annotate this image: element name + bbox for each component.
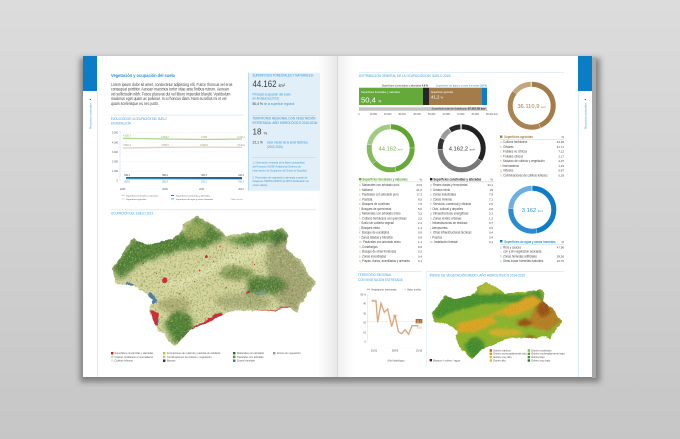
table: forest surfaces: 1,4 (418, 226, 422, 230)
legend: land use (111, 352, 301, 363)
table: built surfaces: 0,4 (489, 230, 493, 234)
table: agricultural surfaces: 41,71 (557, 145, 564, 149)
donut: forest: 44.162 km² (379, 146, 403, 152)
legend: NDVI: Blancos / nubes / agua (433, 358, 461, 362)
axis: 80.000 (472, 113, 480, 116)
table: built surfaces: l. Puertos (430, 235, 442, 239)
text: main land occupation: Principal ocupación del suelo (252, 93, 291, 97)
data labels (123, 135, 246, 184)
table: forest surfaces: f. Bosques de quercíneas (359, 207, 392, 211)
table: forest surfaces: Superficies forestales y naturales (362, 177, 408, 182)
legend: land use: Formaciones de matorral y pastizal sin arbolado (167, 352, 221, 355)
legend: Superficies forestales y naturales (126, 194, 159, 197)
table: forest surfaces: 5,0 (418, 207, 422, 211)
panel: general distribution bar (358, 72, 564, 116)
data labels: 4.526,7 (123, 135, 132, 137)
footnotes: 1. Información extraída de la Base cartográfica (252, 160, 305, 165)
legend: NDVI: Estrés muy bajo (531, 358, 551, 362)
series: forest (123, 138, 242, 140)
table: built surfaces: 7,9 (489, 192, 493, 196)
table: forest surfaces (358, 177, 423, 263)
data labels: 4.399 (201, 137, 208, 139)
table: forest surfaces: d. Pastizal (359, 197, 372, 201)
table: forest surfaces: i. Suelo sin cubierta vegetal (359, 221, 394, 225)
table: water surfaces: 29,36 (557, 254, 564, 258)
axis (358, 110, 498, 116)
legend: land use: Cultivos leñosos (114, 360, 133, 363)
legend: Superficies de agua y zonas húmedas (176, 198, 214, 201)
data labels: 18,0 (417, 327, 422, 330)
x labels: 15/16 (416, 350, 423, 353)
legend: NDVI: Estrés máximo (493, 348, 511, 352)
table: built surfaces: c. Zonas industriales (430, 192, 456, 197)
series: water ribbon (126, 176, 242, 179)
heading: forest surfaces: SUPERFICIES FORESTALES Y NATURALES¹ (252, 74, 314, 78)
heading: vegetated territory (252, 116, 318, 125)
table: agricultural surfaces: 44,39 (557, 140, 564, 144)
table: water surfaces: % (561, 240, 564, 244)
axis: 10.000 (370, 113, 378, 116)
data labels: 316,2 (238, 182, 245, 184)
table: forest surfaces: c. Pastizales con arbolado puro (359, 192, 399, 197)
table: forest surfaces: % (419, 178, 422, 182)
table: forest surfaces: 8,5 (418, 197, 422, 201)
table: agricultural surfaces: h. Combinaciones de cultivos leñosos (500, 173, 548, 177)
heading: vegetated territory: ESTRESADA. AÑO HIDROLÓGICO 2015-2016² (252, 120, 318, 125)
text block: intro: maximus eget quam ac pulvinar. In a rhoncus diam. Nam eu tellus mi et vel (111, 97, 227, 101)
panel: line chart land use evolution: 2009 (162, 188, 168, 191)
panel: line chart land use evolution (111, 114, 246, 201)
axis: 50 % (360, 293, 367, 296)
table: forest surfaces: 1,1 (418, 240, 422, 244)
heading: map title: ÍNDICE DE VEGETACIÓN MEDIO. AÑO HIDROLÓGICO 2014-2015 (430, 272, 525, 277)
heading: distribution title: DISTRIBUCIÓN GENERAL DE LA OCUPACIÓN DEL SUELO 2015¹ (359, 73, 452, 78)
map: water bodies (127, 282, 268, 326)
tab: right section marker: Recursos naturales (584, 103, 588, 129)
stressed line (372, 301, 418, 334)
heading: chart title (358, 273, 403, 282)
axis labels: 3.000 (112, 151, 119, 154)
labels above bar (382, 84, 487, 88)
total bar: Superficie total de Andalucía: 87.597,85 km² (432, 107, 486, 111)
table: water surfaces: 47,96 (557, 246, 564, 250)
x labels (371, 350, 423, 362)
donut: agricultural: 36.110,9 km² (517, 104, 546, 110)
legend: NDVI: Estrés muy alto (493, 355, 512, 359)
table: water surfaces: con y sin vegetación asociada (503, 249, 542, 254)
panel: line chart land use evolution: 2011 (199, 188, 205, 191)
heading: chart title: EVOLUCIÓN DE LA OCUPACIÓN DEL SUELO (111, 116, 167, 121)
legend: land use: Bosque (167, 360, 176, 363)
data labels (372, 300, 422, 330)
legend: NDVI: Estrés moderado (531, 348, 552, 352)
axis: 90.000 km² (486, 113, 498, 116)
value tag: 21,1 (417, 320, 422, 323)
table: water surfaces (500, 240, 564, 263)
tab: right section marker (578, 56, 592, 129)
table: built surfaces: 29 (490, 188, 493, 192)
series: water (126, 178, 242, 179)
table: forest surfaces: j. Bosques mixto (358, 226, 380, 230)
map: NDVI (431, 281, 564, 359)
table: built surfaces: a. Redes viarias y ferroviarias (430, 183, 468, 187)
text block: intro: consequat porttitor. Aenean maximus tortor vitae ante finibus rutrum. Aenean (111, 87, 229, 92)
total bar (359, 107, 487, 111)
footnotes: imágenes TERRA-MODIS de NDVI (Evaluación de (252, 179, 310, 183)
table: forest surfaces: 0,1 (418, 259, 422, 263)
heading: chart title: CON VEGETACIÓN ESTRESADA (358, 277, 403, 282)
table: forest surfaces: 7,5 (418, 202, 422, 206)
table: built surfaces: d. Zonas mineras (430, 197, 452, 201)
table: forest surfaces: l. Zonas taladas y tránsitos (359, 235, 393, 239)
axis labels: 4.000 (112, 141, 119, 144)
table: agricultural surfaces: 1,23 (558, 164, 564, 168)
axis: 20.000 (384, 113, 392, 116)
table: forest surfaces: 0,4 (418, 254, 422, 258)
axis: 30.000 (398, 113, 406, 116)
data labels: 396,2 (162, 175, 169, 177)
table: forest surfaces: 3,2 (418, 212, 422, 216)
table: forest surfaces: o. Bosque de otras frondosas (359, 249, 397, 254)
legend: Superficies agrícolas (126, 198, 147, 201)
page: left (83, 56, 338, 377)
axis labels: 0 (117, 180, 119, 182)
stacked bar: Superficies forestales y naturales (361, 90, 401, 94)
legend: land use: Superficies construidas y alteradas (114, 352, 154, 355)
axis: 40 (363, 303, 367, 306)
donut: forest (369, 127, 412, 170)
table: built surfaces: b. Urbano mixto (430, 188, 450, 192)
data labels: 3.611,0 (237, 145, 245, 147)
data labels: 416,2 (238, 175, 245, 177)
legend: NDVI: Estrés bajo (531, 355, 545, 359)
footnotes (252, 160, 310, 187)
axis labels: 2.000 (112, 160, 119, 164)
footnotes: 2. Porcentaje de vegetación estresada a partir de (252, 175, 308, 179)
legend: NDVI (430, 348, 565, 362)
map: urban areas (116, 234, 294, 335)
table: built surfaces: e. Servicios, comercial y oficinas (430, 202, 471, 206)
data labels: 4.416,2 (237, 137, 246, 139)
series: agricultural (123, 146, 242, 149)
axis (360, 293, 367, 344)
table: built surfaces: m. Instalación forestal (430, 240, 458, 244)
legend: land use: Cultivos herbáceos e invernaderos (114, 356, 154, 359)
table: agricultural surfaces: 0,87 (558, 168, 564, 172)
heading: chart title: TERRITORIO REGIONAL (358, 273, 392, 277)
table: forest surfaces: 0,3 (418, 250, 422, 254)
table: agricultural surfaces: 2,17 (558, 154, 564, 158)
table: built surfaces: 0,7 (489, 221, 493, 225)
legend: Vegetación estresada (371, 287, 397, 291)
table: forest surfaces: m. Pastizales con arbolado mixto (359, 240, 401, 244)
tab: left section marker: Recursos naturales (88, 103, 92, 129)
table: agricultural surfaces: d. Frutales cítricos (500, 154, 524, 158)
data labels: 315,1 (201, 182, 208, 184)
axis labels: 5.000 (112, 132, 119, 135)
tab: left section marker (83, 56, 97, 129)
table: forest surfaces: q. Playas, dunas, acantilados y arenales (359, 259, 410, 263)
axis: 50.000 (428, 113, 436, 116)
figure: 44.162 km2: 44.162 km² (252, 78, 286, 89)
table: built surfaces: 7,1 (489, 197, 493, 201)
legend: Valor medio (407, 287, 421, 291)
x labels: 08/09 (392, 350, 399, 353)
x labels: 01/02 (371, 350, 378, 353)
table: water surfaces: Superficies de agua y zonas húmedas (504, 240, 556, 244)
legend: NDVI: Estrés moderadamente bajo (531, 352, 565, 356)
legend: * Miles de ha (230, 199, 243, 201)
axis: 0 (358, 113, 360, 116)
data labels: 3.620,9 (200, 145, 209, 147)
donut: built (440, 127, 483, 170)
text: historical average: valor medio de la serie histórica (267, 140, 308, 144)
table: agricultural surfaces: b. Olivares (500, 145, 514, 149)
text block: intro (111, 83, 232, 106)
table: forest surfaces: 0,9 (418, 235, 422, 239)
text: historical average (267, 140, 308, 149)
heading: map title: OCUPACIÓN DEL SUELO 2013 (111, 210, 153, 216)
table: agricultural surfaces: % (561, 135, 564, 139)
data labels: 3.605,5 (161, 145, 170, 147)
text: historical average: (2002-2016) (267, 145, 283, 149)
data labels: 305,3 (162, 182, 169, 184)
table: built surfaces: 1,3 (489, 216, 493, 220)
table: agricultural surfaces: 7,12 (558, 150, 564, 154)
text: main land occupation: en Andalucía (2013) (252, 96, 279, 101)
table: forest surfaces: 0,9 (418, 230, 422, 234)
table: agricultural surfaces: 0,29 (558, 173, 564, 177)
book shadow (80, 58, 600, 382)
table: forest surfaces: h. Cultivos herbáceos con quercíneas (359, 216, 407, 220)
table: forest surfaces: 2,5 (418, 216, 422, 220)
footnotes: Información de Ocupación del Suelo de España). (252, 168, 307, 172)
table: agricultural surfaces: c. Frutales no cítricos (500, 149, 527, 154)
table: agricultural surfaces: Superficies agrícolas (504, 135, 533, 139)
data labels: 3.561,3 (123, 145, 132, 147)
table: agricultural surfaces (500, 135, 564, 177)
axis labels (112, 132, 119, 182)
donut: built: 4.162,2 km² (449, 146, 475, 152)
donut: water (511, 188, 554, 231)
axis: 70.000 (457, 113, 465, 116)
axis: 0 (365, 341, 367, 344)
table: built surfaces: 2,9 (489, 202, 493, 206)
panel: stressed vegetation chart (358, 271, 423, 362)
table: built surfaces (429, 177, 494, 244)
legend: land use: Combinaciones de cultivos y vegetación (167, 356, 212, 359)
data labels: 406,3 (201, 175, 208, 177)
table: forest surfaces: p. Zonas incendiadas (359, 254, 386, 258)
data labels: 44,3 (372, 300, 377, 303)
data labels: 302,8 (124, 182, 131, 184)
legend: NDVI: Estrés extremadamente alto (493, 352, 527, 356)
table: built surfaces: 2,3 (489, 212, 493, 216)
table: built surfaces: % (490, 178, 493, 182)
table: agricultural surfaces: g. Viñedos (500, 168, 514, 173)
axis: 20 (363, 322, 367, 325)
table: agricultural surfaces: f. Invernaderos (500, 164, 519, 168)
figure: 22.1 percent: 22,1 % (252, 140, 264, 144)
text block: intro: quam scelerisque eu nec justo. (111, 102, 159, 106)
table: forest surfaces: 24,9 (416, 183, 422, 187)
data labels: 339,3 (124, 175, 131, 177)
figure: 50.4 percent: 50,4 % de la superficie regional (252, 102, 295, 106)
table: built surfaces: 2,8 (489, 207, 493, 211)
table: forest surfaces: g. Matorrales con arbolado mixto (359, 211, 401, 216)
stacked bar: 50,4 % (361, 96, 381, 104)
table: forest surfaces: a. Matorrales con arbolado puro (359, 183, 400, 187)
table: agricultural surfaces: a. Cultivos herbáceos (500, 140, 528, 144)
table: water surfaces: b. Zonas húmedas artificiales (500, 254, 537, 259)
text block: intro: Lorem ipsum dolor sit amet, consectetur adipiscing elit. Fusce rhoncus vel eros (111, 83, 232, 87)
heading: vegetated territory: TERRITORIO REGIONAL CON VEGETACIÓN (252, 116, 316, 120)
axis: 60.000 (443, 113, 451, 116)
table: forest surfaces: 0,6 (418, 245, 422, 249)
donut: water: 3.162 km² (522, 208, 543, 214)
table: water surfaces: 22,70 (557, 259, 564, 263)
map: land use (110, 213, 318, 347)
legend (367, 287, 421, 291)
mean line (367, 321, 422, 323)
table: forest surfaces: 2,4 (418, 221, 422, 225)
table: water surfaces: c. Otras zonas húmedas naturales (500, 259, 544, 263)
legend: land use: Matorrales con arbolado (237, 352, 265, 355)
heading: page title: Vegetación y ocupación del suelo (111, 73, 175, 79)
table: agricultural surfaces: e. Mosaico de cultivos y vegetación (500, 159, 545, 163)
panel: line chart land use evolution: 2013 (238, 188, 244, 191)
donut: agricultural (510, 84, 553, 127)
footnotes: estrés diario). (252, 183, 268, 187)
table: forest surfaces: e. Bosques de coníferas (359, 202, 390, 206)
panel: key figures sidebar (248, 73, 320, 191)
table: built surfaces: 0,4 (489, 235, 493, 239)
table: built surfaces: k. Otras infraestructuras técnicas (430, 230, 472, 235)
text: main land occupation (252, 93, 291, 101)
legend: land use: Zonas sin vegetación (277, 352, 301, 355)
table: built surfaces: h. Zonas verdes urbanas (430, 216, 462, 220)
axis: 30 (363, 312, 367, 315)
table: forest surfaces: b. Matorral (359, 188, 373, 192)
page: right (338, 56, 596, 378)
panel: NDVI map (426, 271, 565, 366)
labels above bar: Superficies construidas y alteradas 4,8 % (382, 84, 429, 88)
stacked bar (359, 88, 487, 105)
legend (122, 194, 243, 201)
text block: intro: vel sollicitudin nibh. Fusce placerat dui vel libero imperdiet blandit. Vestibulum (111, 92, 230, 96)
table: built surfaces: 0,1 (489, 240, 493, 244)
figure: 18 percent: 18 % (252, 128, 268, 136)
table: water surfaces: a. Ríos y cauces (500, 245, 521, 250)
panel: land use map (110, 209, 318, 363)
table: forest surfaces: 21,6 (416, 188, 422, 192)
table: built surfaces: Superficies construidas y alteradas (433, 177, 481, 182)
table: built surfaces: j. Aeropuertos (429, 226, 448, 230)
axis labels: 1.000 (112, 170, 119, 173)
stacked bar: Superficies agrícolas (431, 90, 453, 94)
x labels: Año hidrológico (387, 359, 405, 362)
panel: line chart land use evolution: 2005 (120, 188, 126, 191)
stacked bar: 41,2 % (431, 94, 444, 100)
axis: 10 (363, 331, 367, 334)
heading: chart title (111, 116, 167, 126)
table: built surfaces: f. Ocio, cultural y deportes (430, 207, 463, 211)
table: forest surfaces: 17,3 (416, 192, 422, 196)
data labels: 25,3 (393, 315, 398, 318)
table: built surfaces: g. Infraestructuras energéticas (430, 211, 469, 216)
footnotes: del Proyecto SIOSE-Andalucía (Sistema de (252, 164, 301, 168)
data labels: 4.503,2 (161, 137, 170, 139)
labels above bar: Superficies de agua y zonas húmedas 3,6 % (436, 84, 487, 88)
legend: Superficies construidas y alteradas (176, 194, 211, 197)
table: built surfaces: 0,5 (489, 226, 493, 230)
heading: chart title: EN ANDALUCÍA¹ (111, 121, 131, 126)
table: built surfaces: 34,1 (487, 183, 493, 187)
chart axes and grid (120, 131, 243, 181)
axis: 40.000 (413, 113, 421, 116)
table: forest surfaces: k. Bosque de eucaliptos (359, 230, 390, 235)
table: built surfaces: i. Infraestructuras de residuos (430, 221, 468, 225)
legend: land use: Pastizales con arbolado (237, 356, 264, 359)
table: agricultural surfaces: 2,07 (558, 159, 564, 163)
table: forest surfaces: n. Cortafuegos (359, 245, 378, 249)
legend: land use: Zonas húmedas (237, 360, 256, 363)
legend: NDVI: Estrés alto (493, 358, 506, 362)
